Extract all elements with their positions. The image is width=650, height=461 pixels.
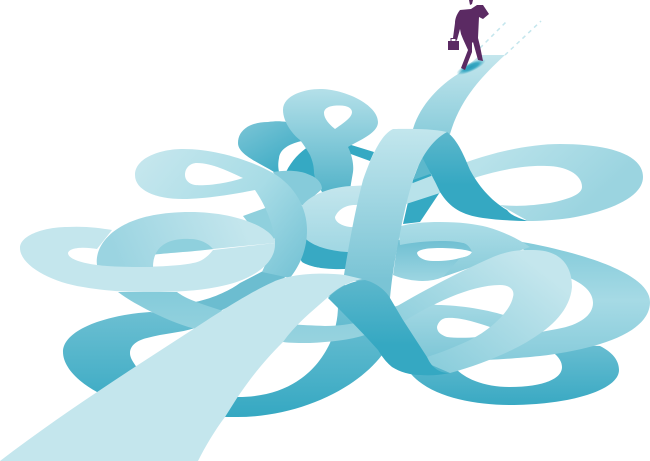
ribbon: path beneath the man	[413, 55, 505, 134]
ribbon: dark lower-left ring	[63, 285, 395, 417]
ribbon: top right dark twist	[422, 132, 528, 221]
ribbon: upper middle ring	[393, 222, 530, 281]
ribbon: upper ring of left coil	[97, 212, 275, 267]
ribbon: upper left loop	[135, 149, 307, 278]
ribbon: band behind left loop	[243, 207, 280, 243]
ribbon: central dark twist	[328, 280, 450, 375]
ribbon: tail of left loop	[195, 268, 296, 311]
ribbon: dark fold behind the tall ribbon	[403, 157, 440, 224]
ribbon: central disc	[302, 184, 390, 256]
ribbon: middle lower band	[118, 292, 405, 343]
shadow beneath the man	[455, 56, 487, 78]
ribbon: band seen through the front ring	[392, 304, 510, 358]
ribbon: dark underside of central disc	[300, 232, 390, 269]
ribbon: front right ring	[392, 250, 572, 373]
ribbon: piece under left loop	[273, 171, 322, 206]
ribbon: dark lower-right ring	[408, 340, 619, 405]
ribbon: upper right ring	[400, 144, 643, 221]
ribbon: big right ring	[470, 240, 650, 360]
ribbon: dark ring behind figure eight	[238, 121, 374, 180]
dashed lines: path continuing into the distance	[480, 21, 541, 55]
figure: businessman with briefcase	[448, 0, 489, 70]
ribbon: foreground path	[0, 274, 362, 461]
ribbon: figure eight	[283, 89, 378, 192]
ribbon: teal piece inside far left ring	[152, 236, 214, 255]
ribbon: far left crescent	[20, 227, 275, 292]
ribbon: tall central ribbon	[344, 129, 447, 298]
